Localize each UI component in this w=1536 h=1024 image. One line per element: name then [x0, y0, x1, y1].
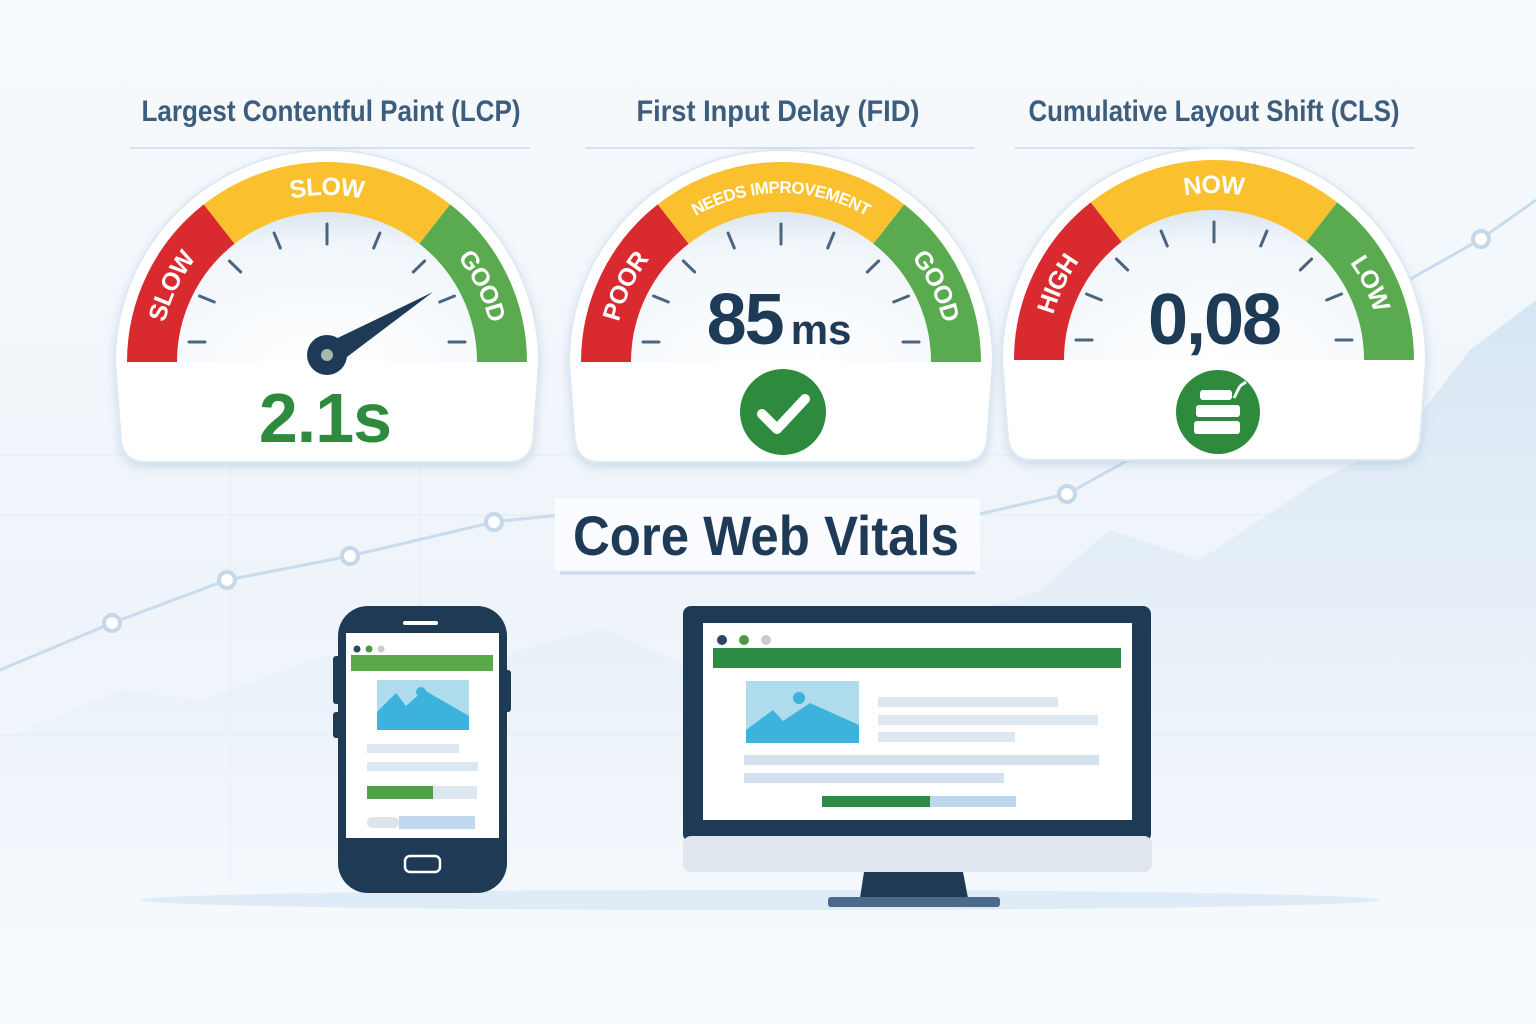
band labels: [602, 181, 958, 320]
background chart: [0, 200, 1536, 910]
band labels: NOW: [1184, 176, 1246, 196]
title: CLS: Cumulative Layout Shift (CLS): [1028, 95, 1400, 128]
gauge: CLS: [998, 147, 1430, 468]
phone: [333, 606, 511, 893]
band labels: [150, 178, 504, 321]
title: FID: First Input Delay (FID): [636, 95, 920, 128]
band labels: LOW: [1350, 254, 1391, 309]
band labels: SLOW: [150, 248, 194, 321]
value: 85ms: [707, 280, 851, 360]
phone screen content: [351, 646, 493, 829]
needle: [307, 292, 433, 375]
title: LCP: Largest Contentful Paint (LCP): [142, 95, 520, 128]
band labels: NEEDS IMPROVEMENT: [691, 181, 872, 216]
value: 2.1s: [259, 379, 391, 457]
heading: Core Web Vitals: Core Web Vitals: [573, 504, 959, 567]
band labels: [1037, 176, 1391, 314]
band labels: SLOW: [290, 178, 366, 198]
band labels: HIGH: [1037, 252, 1078, 314]
gauge: FID: [564, 149, 998, 470]
icon: check: [740, 369, 826, 455]
band labels: GOOD: [461, 251, 504, 320]
monitor: [683, 606, 1152, 907]
band labels: POOR: [602, 252, 650, 320]
band labels: GOOD: [915, 251, 958, 320]
monitor screen content: [713, 635, 1121, 807]
gauge: LCP: [110, 149, 544, 470]
icon: stacked layout: [1176, 370, 1260, 454]
value: 0,08: [1148, 280, 1280, 360]
